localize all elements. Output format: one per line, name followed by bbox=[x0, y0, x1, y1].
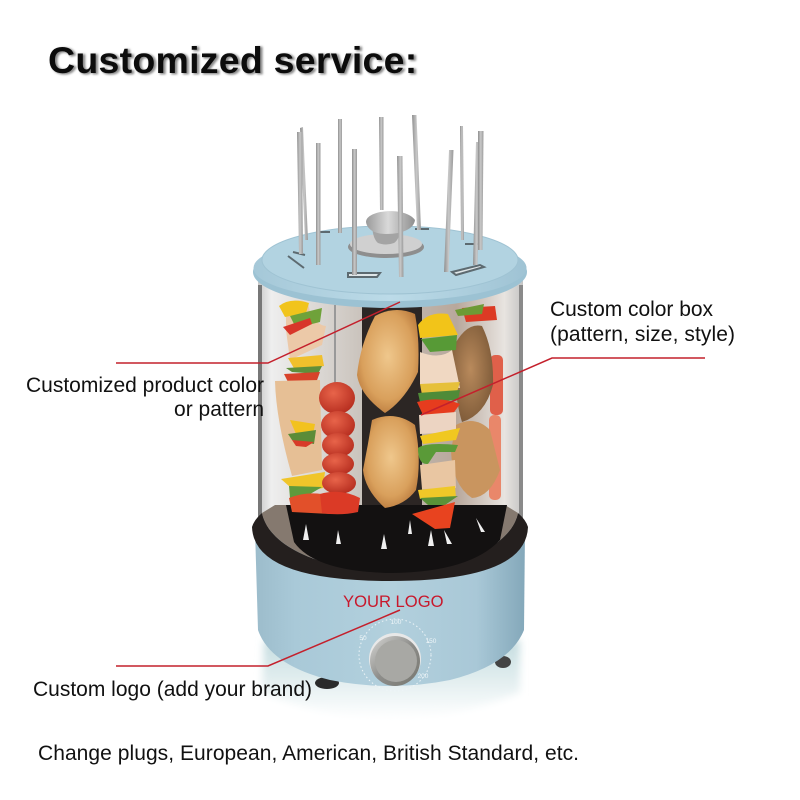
callout text: custom color box: Custom color box bbox=[550, 298, 714, 321]
callout line: product color bbox=[116, 302, 400, 363]
base body bbox=[255, 530, 525, 686]
callout text: custom logo: Custom logo (add your brand) bbox=[33, 678, 312, 701]
temperature dial: 100 bbox=[391, 619, 402, 626]
tomato skewer bbox=[319, 305, 360, 514]
callout line: color box bbox=[421, 358, 705, 415]
your logo text: YOUR LOGO bbox=[343, 592, 444, 611]
dark chicken wings, right bbox=[451, 326, 503, 500]
callout text: customized product color: Customized product color bbox=[26, 374, 264, 397]
title: Customized service: bbox=[48, 39, 417, 81]
callout text: customized product color: or pattern bbox=[174, 398, 264, 421]
skewers rods bbox=[297, 115, 484, 277]
title: Customized service: bbox=[50, 40, 419, 82]
temperature dial: 200 bbox=[418, 673, 429, 680]
centre lid knob bbox=[348, 211, 424, 258]
lid bbox=[253, 226, 527, 308]
temperature dial: 50 bbox=[359, 635, 367, 642]
floor reflection bbox=[262, 640, 520, 718]
temperature dial: 150 bbox=[426, 638, 437, 645]
callout line: logo bbox=[116, 610, 400, 666]
callout text: custom color box bbox=[550, 298, 735, 346]
temperature dial bbox=[359, 619, 437, 691]
right pepper and chicken skewer bbox=[412, 304, 497, 529]
feet bbox=[315, 656, 511, 689]
base rim and grill cones bbox=[252, 505, 528, 581]
callout text: customized product color bbox=[26, 374, 264, 421]
product: rotisserie grill bbox=[252, 115, 528, 718]
footnote: plugs: Change plugs, European, American, British Standard, etc. bbox=[38, 742, 579, 765]
left chicken and pepper skewer bbox=[275, 300, 330, 514]
glass chamber bbox=[258, 280, 523, 528]
chicken wings, centre bbox=[357, 310, 419, 508]
callout text: custom color box: (pattern, size, style) bbox=[550, 323, 735, 346]
